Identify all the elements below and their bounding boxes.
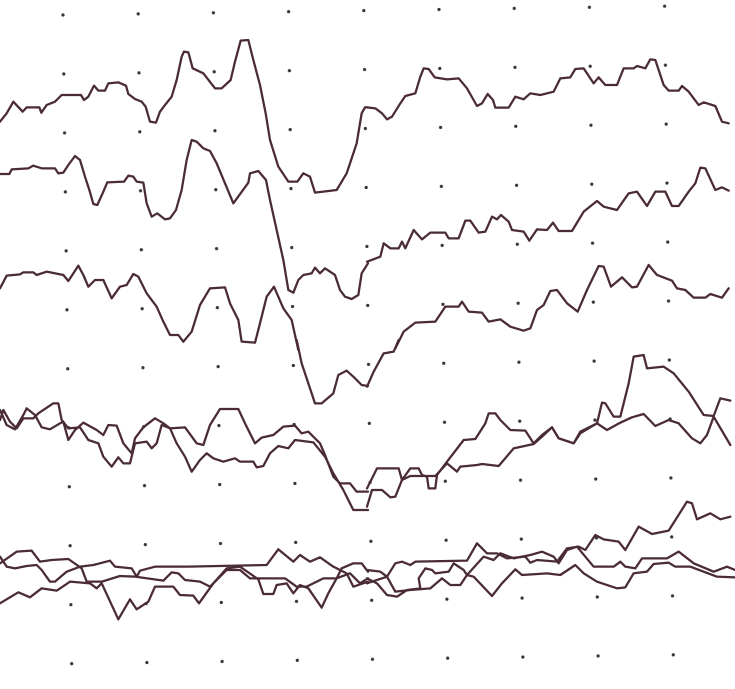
trace 7: bottom band, middle channel	[0, 547, 735, 597]
trace 8: bottom band, lowest channel	[0, 563, 735, 619]
trace 3: third channel	[0, 265, 729, 403]
trace 1: top channel	[0, 40, 729, 193]
trace 5: fifth channel, lower of pair	[0, 403, 730, 510]
trace 2: second channel	[0, 140, 729, 299]
trace 4: fourth channel, upper of pair	[0, 355, 730, 492]
trace 6: bottom band, rising channel	[0, 502, 730, 587]
